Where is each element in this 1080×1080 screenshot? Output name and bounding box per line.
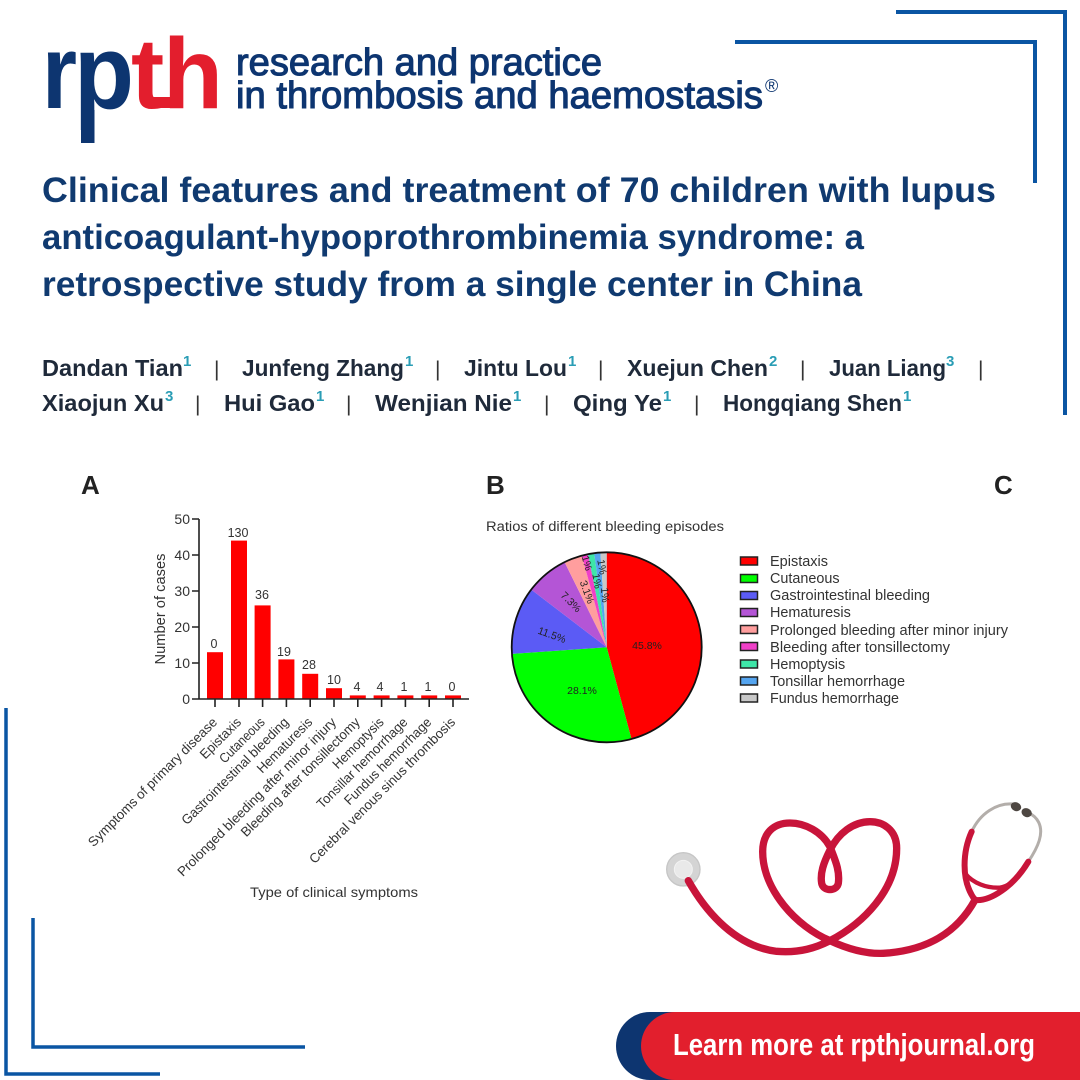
authors: 1 <box>663 388 671 405</box>
logo: rpth: r <box>42 14 77 131</box>
authors: | <box>544 393 549 416</box>
pie chart title: Ratios of different bleeding episodes <box>486 519 724 534</box>
title: Clinical features and treatment of 70 children with lupus <box>42 171 996 210</box>
frame: bottom left corner lines <box>6 708 305 1074</box>
authors: Qing Ye <box>573 390 662 416</box>
pie percentage labels: 1% <box>594 559 609 576</box>
authors: 2 <box>769 353 777 370</box>
x axis category labels <box>85 714 458 879</box>
pie percentage labels: 1% <box>598 587 611 603</box>
pie percentage labels: 28.1% <box>567 685 597 697</box>
bar value labels: 28 <box>302 658 316 672</box>
authors: | <box>694 393 699 416</box>
journal name: research and practice <box>236 42 602 84</box>
x axis category labels: Symptoms of primary disease <box>85 715 220 850</box>
pie percentage labels: 3.1% <box>577 579 596 605</box>
bar value labels: 36 <box>255 588 269 602</box>
x axis category labels: Bleeding after tonsillectomy <box>238 714 363 840</box>
authors: | <box>435 358 440 381</box>
pie legend: Fundus hemorrhage <box>770 691 899 707</box>
x axis category labels: Gastrointestinal bleeding <box>178 715 292 828</box>
x axis category labels: Prolonged bleeding after minor injury <box>174 714 339 879</box>
authors: Xiaojun Xu <box>42 390 164 416</box>
authors: 3 <box>165 388 173 405</box>
pie legend: Tonsillar hemorrhage <box>770 674 905 690</box>
authors: | <box>598 358 603 381</box>
authors: 3 <box>946 353 954 370</box>
y axis tick labels: 0 <box>182 691 190 707</box>
pie legend <box>740 554 1009 707</box>
authors: 1 <box>568 353 576 370</box>
logo: rpth: t <box>131 18 164 130</box>
bar value labels <box>211 526 456 694</box>
pie legend: Cutaneous <box>770 571 840 587</box>
pie percentage labels: 11.5% <box>536 625 568 646</box>
x axis category labels: Hematuresis <box>254 714 316 776</box>
x axis category labels: Epistaxis <box>197 714 244 762</box>
bars <box>207 541 461 699</box>
bar value labels: 10 <box>327 673 341 687</box>
pie legend: Hemoptysis <box>770 657 845 673</box>
y axis tick labels: 10 <box>174 655 190 671</box>
bar value labels: 19 <box>277 645 291 659</box>
pie percentage labels: 1% <box>579 554 594 572</box>
x axis category labels: Tonsillar hemorrhage <box>314 715 411 811</box>
axes <box>192 519 469 707</box>
banner: learn more <box>616 1012 1080 1080</box>
pie percentage labels <box>536 554 662 697</box>
authors: Juan Liang <box>829 355 946 381</box>
x axis category labels: Cutaneous <box>216 714 268 766</box>
pie legend: Bleeding after tonsillectomy <box>770 640 951 656</box>
title: retrospective study from a single center in China <box>42 265 863 304</box>
x axis category labels: Cerebral venous sinus thrombosis <box>306 714 458 867</box>
title: anticoagulant-hypoprothrombinemia syndrome: a <box>42 218 865 257</box>
authors: 1 <box>316 388 324 405</box>
authors: Dandan Tian <box>42 355 183 381</box>
authors: 1 <box>513 388 521 405</box>
authors: Jintu Lou <box>464 355 567 381</box>
authors: 1 <box>183 353 191 370</box>
y axis tick labels <box>174 511 190 707</box>
authors: | <box>195 393 200 416</box>
logo: rpth: h <box>163 18 223 130</box>
pie legend: Hematuresis <box>770 605 851 621</box>
bar value labels: 4 <box>354 680 361 694</box>
journal name <box>236 42 778 117</box>
x axis title: Type of clinical symptoms <box>250 884 418 900</box>
pie percentage labels: 7.3% <box>558 590 583 615</box>
y axis title: Number of cases <box>153 554 169 664</box>
y axis tick labels: 20 <box>174 619 190 635</box>
panel letter B: B <box>486 470 505 500</box>
journal name: in thrombosis and haemostasis <box>236 75 763 117</box>
authors: Hongqiang Shen <box>723 390 902 416</box>
panel letter A: A <box>81 470 100 500</box>
y axis tick labels: 40 <box>174 547 190 563</box>
authors: 1 <box>903 388 911 405</box>
y axis tick labels: 30 <box>174 583 190 599</box>
authors: Wenjian Nie <box>375 390 512 416</box>
panel letter C: C <box>994 470 1013 500</box>
panel: B pie chart <box>512 552 702 742</box>
authors: | <box>346 393 351 416</box>
authors: | <box>800 358 805 381</box>
title <box>42 171 996 304</box>
bar value labels: 130 <box>228 526 248 540</box>
authors: Hui Gao <box>224 390 315 416</box>
bar value labels: 0 <box>211 637 218 651</box>
y axis tick labels: 50 <box>174 511 190 527</box>
authors <box>42 353 983 416</box>
pie legend: Gastrointestinal bleeding <box>770 588 930 604</box>
icon: stethoscope with heart <box>667 800 1041 953</box>
pie legend: Epistaxis <box>770 554 828 570</box>
logo: rpth <box>42 14 223 143</box>
pie percentage labels: 45.8% <box>632 640 662 652</box>
x axis category labels: Hemoptysis <box>329 714 387 772</box>
authors: | <box>214 358 219 381</box>
bar value labels: 0 <box>449 680 456 694</box>
pie percentage labels: 1% <box>589 573 604 590</box>
frame: top right corner lines <box>735 12 1065 415</box>
logo: rpth: p <box>74 14 134 131</box>
bar value labels: 1 <box>425 680 432 694</box>
journal name: ® <box>765 76 778 96</box>
bar value labels: 1 <box>401 680 408 694</box>
pie legend: Prolonged bleeding after minor injury <box>770 623 1009 639</box>
authors: 1 <box>405 353 413 370</box>
authors: Xuejun Chen <box>627 355 768 381</box>
bar value labels: 4 <box>377 680 384 694</box>
x axis category labels: Fundus hemorrhage <box>341 715 434 808</box>
authors: Junfeng Zhang <box>242 355 404 381</box>
authors: | <box>978 358 983 381</box>
panel: A bar chart <box>85 511 469 900</box>
